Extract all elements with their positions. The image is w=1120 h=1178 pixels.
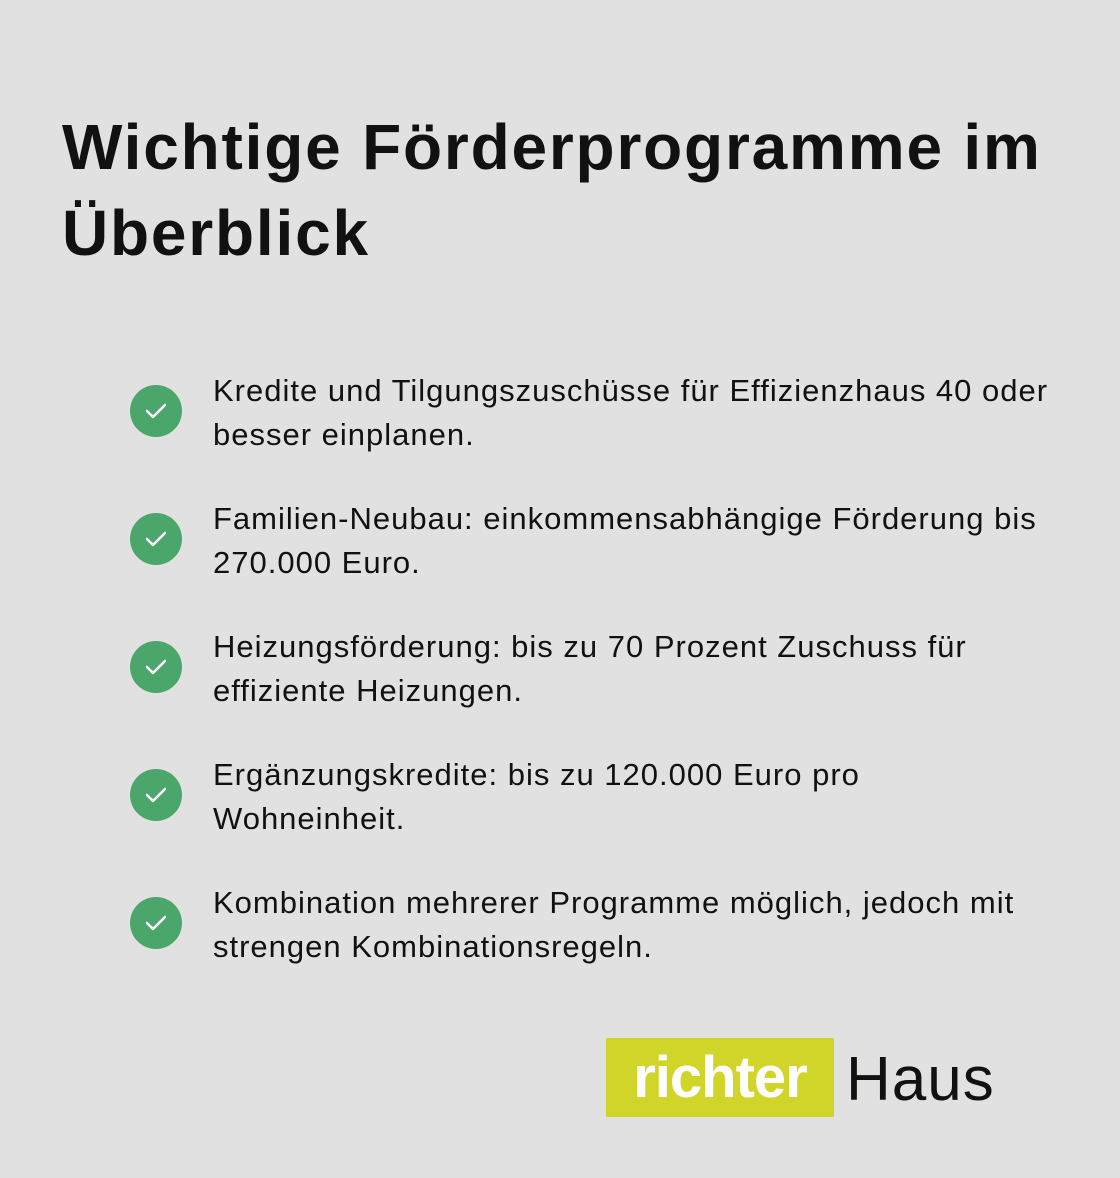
logo box: richter xyxy=(633,1045,807,1110)
text xyxy=(213,757,860,836)
text: Heizungsförderung: bis zu 70 Prozent Zuschuss für xyxy=(213,629,967,664)
logo xyxy=(606,1038,995,1117)
icon: check xyxy=(130,897,182,949)
text: effiziente Heizungen. xyxy=(213,673,523,708)
text: besser einplanen. xyxy=(213,417,475,452)
title: Wichtige Förderprogramme im xyxy=(62,111,1042,183)
text: Kombination mehrerer Programme möglich, jedoch mit xyxy=(213,885,1014,920)
item 4 xyxy=(130,757,860,836)
item 5 xyxy=(130,885,1014,964)
text: 270.000 Euro. xyxy=(213,545,421,580)
item 3 xyxy=(130,629,967,708)
logo word: Haus xyxy=(846,1045,995,1114)
item 1 xyxy=(130,373,1048,452)
icon: check xyxy=(130,769,182,821)
text xyxy=(213,373,1048,452)
text xyxy=(213,501,1037,580)
icon: check xyxy=(130,385,182,437)
icon: check xyxy=(130,513,182,565)
text: Ergänzungskredite: bis zu 120.000 Euro pro xyxy=(213,757,860,792)
title: Überblick xyxy=(62,197,370,269)
text xyxy=(213,629,967,708)
item 2 xyxy=(130,501,1037,580)
text: Familien-Neubau: einkommensabhängige Förderung bis xyxy=(213,501,1037,536)
text: Kredite und Tilgungszuschüsse für Effizienzhaus 40 oder xyxy=(213,373,1048,408)
text: Wohneinheit. xyxy=(213,801,405,836)
text xyxy=(213,885,1014,964)
text: strengen Kombinationsregeln. xyxy=(213,929,653,964)
title xyxy=(62,111,1042,269)
logo box xyxy=(606,1038,834,1117)
icon: check xyxy=(130,641,182,693)
